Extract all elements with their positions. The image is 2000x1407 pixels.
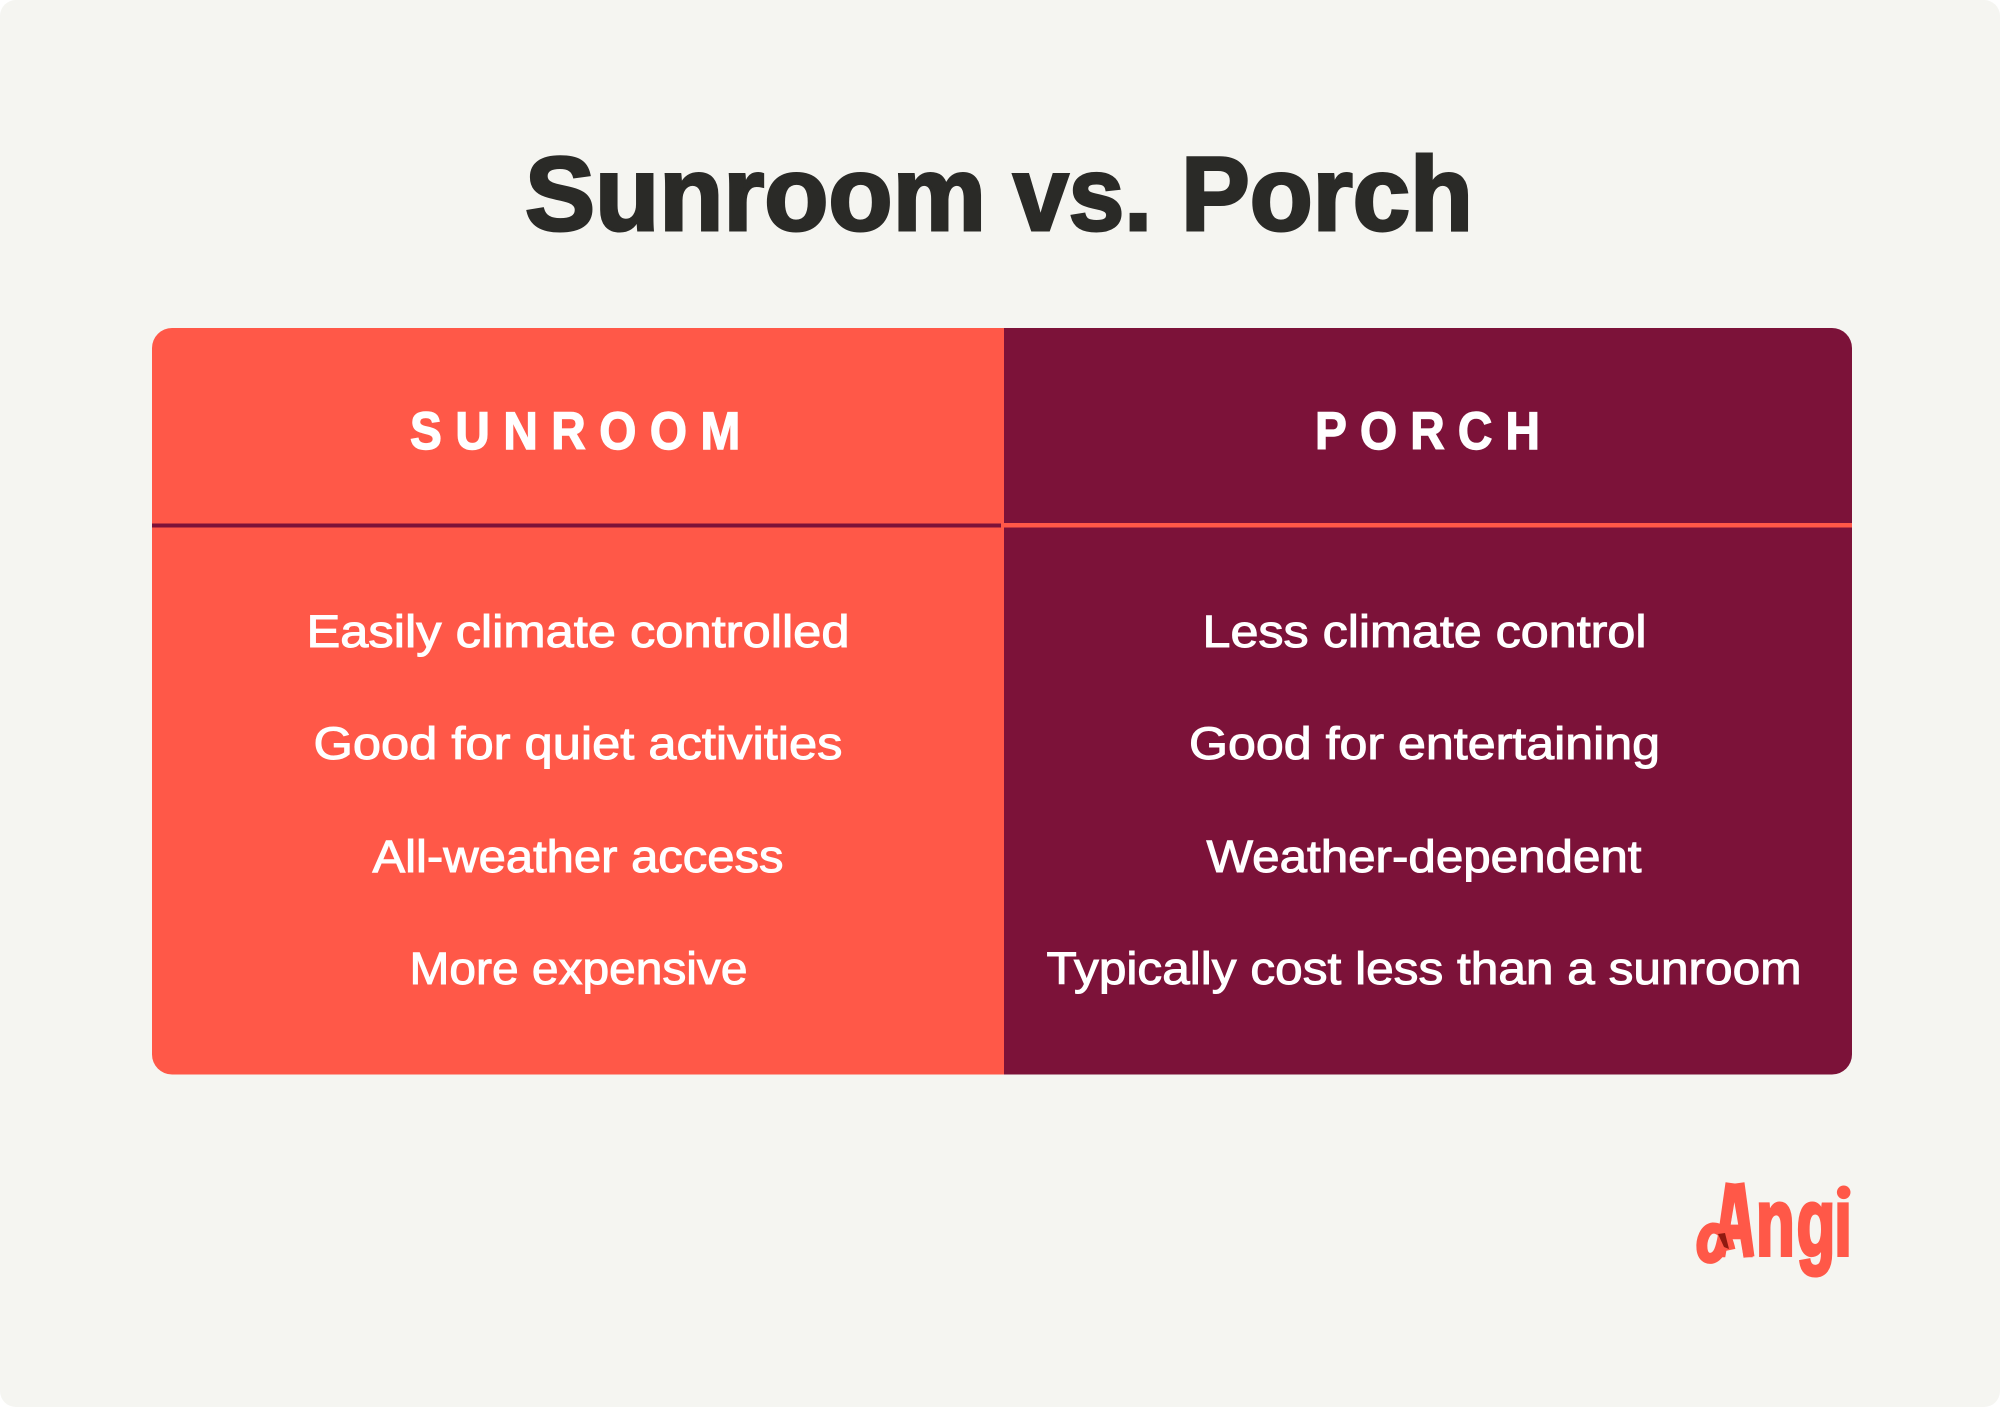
logo: Angi xyxy=(1702,1164,1854,1278)
text: less climate control: Less climate control xyxy=(1202,606,1646,657)
text: all-weather access: All-weather access xyxy=(372,831,784,882)
text: typically cost less than a sunroom: Typically cost less than a sunroom xyxy=(1046,943,1802,994)
title xyxy=(525,136,1473,253)
panel: porch xyxy=(1004,328,1852,1074)
title: Sunroom xyxy=(525,136,986,253)
text: weather-dependent: Weather-dependent xyxy=(1206,831,1642,882)
logo: Angi: A xyxy=(1716,1164,1753,1278)
title: vs. xyxy=(1013,136,1152,253)
text: easily climate controlled: Easily climate controlled xyxy=(306,606,850,657)
heading: porch: PORCH xyxy=(1315,401,1540,461)
panel: sunroom xyxy=(152,328,1004,1074)
logo: Angi: ngi xyxy=(1756,1169,1852,1276)
text: good for quiet activities: Good for quiet activities xyxy=(314,718,842,769)
title: Porch xyxy=(1181,136,1473,253)
text: good for entertaining: Good for entertaining xyxy=(1189,718,1660,769)
heading: sunroom: SUNROOM xyxy=(410,401,740,461)
text: more expensive: More expensive xyxy=(410,943,748,994)
